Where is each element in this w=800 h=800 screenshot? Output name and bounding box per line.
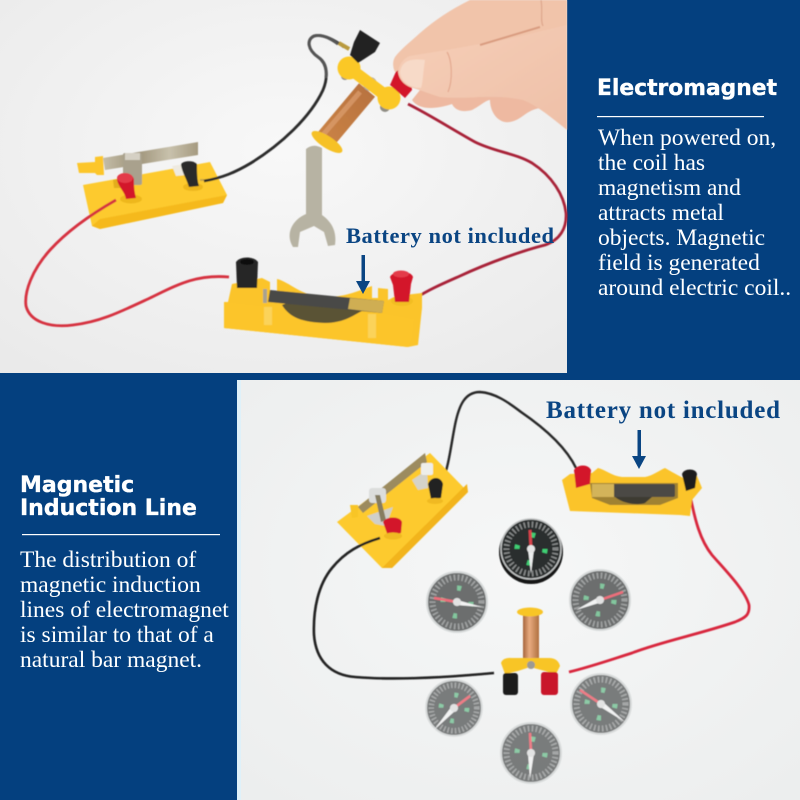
switch, top photo [77, 142, 227, 229]
battery holder, top photo [224, 258, 422, 347]
text block: electromagnet description: magnetism and [598, 175, 741, 201]
text block: electromagnet description: around electric coil.. [598, 275, 791, 301]
label: battery not included, lower photo: Battery not included [546, 397, 780, 424]
heading: magnetic induction line: Magnetic [20, 473, 134, 498]
text block: magnetic induction description: is similar to that of a [20, 622, 214, 648]
heading: magnetic induction line: Induction Line [20, 496, 197, 521]
panel: lower photo [237, 380, 800, 800]
wrench [290, 146, 335, 247]
text block: magnetic induction description: magnetic induction [20, 572, 201, 598]
black wire, switch to coil [314, 538, 494, 678]
red wire, battery to coil [569, 495, 749, 672]
panel: top photo [0, 0, 567, 373]
hand [393, 0, 567, 130]
compass: lower left, faded [426, 680, 482, 736]
text block: electromagnet description: the coil has [598, 150, 705, 176]
compass: upper right, faded [570, 570, 630, 630]
compass: main, north [499, 519, 563, 584]
red wire, top right [408, 104, 566, 298]
compass: bottom, faded [501, 723, 561, 783]
electromagnet coil held in hand [309, 30, 412, 157]
switch, lower photo [337, 453, 468, 568]
battery holder, lower photo [562, 466, 702, 516]
text block: electromagnet description: objects. Magnetic [598, 225, 765, 251]
text block: electromagnet description: field is generated [598, 250, 760, 276]
panel: magnetic induction line text [20, 473, 235, 673]
compass: lower right, faded [571, 674, 631, 734]
text block: magnetic induction description: natural bar magnet. [20, 647, 202, 673]
panel: electromagnet text [597, 76, 791, 301]
red wire, left [26, 200, 229, 326]
arrow: pointing to battery, lower photo [632, 430, 646, 469]
compass: upper left, faded [427, 572, 487, 632]
electromagnet coil, lower photo [501, 608, 560, 695]
heading: electromagnet: Electromagnet [597, 76, 777, 101]
text block: magnetic induction description: lines of electromagnet [20, 597, 229, 623]
black wire, battery to switch [443, 392, 576, 480]
text block: electromagnet description: When powered on, [598, 125, 776, 151]
text block: electromagnet description: attracts metal [598, 200, 724, 226]
black wire, top photo [204, 35, 344, 181]
label: battery not included, top photo: Battery not included [346, 223, 554, 248]
text block: magnetic induction description: The distribution of [20, 547, 196, 573]
arrow: pointing to battery, top photo [356, 255, 370, 294]
